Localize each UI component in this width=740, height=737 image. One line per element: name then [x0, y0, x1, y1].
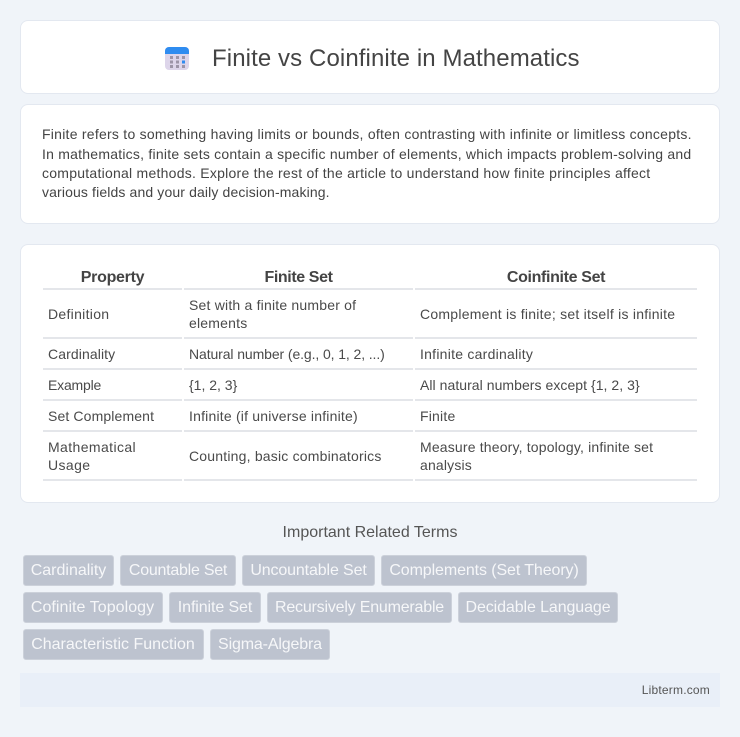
tag: sigma-algebra: Sigma-Algebra [218, 636, 322, 653]
tag: countable set: Countable Set [129, 562, 227, 579]
table header: property: Property [81, 269, 144, 286]
row: mathematical usage: Usage [48, 457, 90, 473]
cardinality: finite: Natural number (e.g., 0, 1, 2, ...) [189, 346, 385, 362]
set complement: coinfinite: Finite [420, 408, 455, 424]
usage: coinfinite: Measure theory, topology, infinite set [420, 439, 653, 455]
definition: finite [189, 297, 356, 331]
usage: coinfinite [420, 439, 653, 473]
tag: recursively enumerable: Recursively Enumerable [275, 599, 444, 616]
table header: coinfinite set: Coinfinite Set [507, 269, 605, 286]
example: coinfinite: All natural numbers except {1, 2, 3} [420, 377, 640, 393]
tag: decidable language: Decidable Language [466, 599, 610, 616]
definition: coinfinite: Complement is finite; set itself is infinite [420, 306, 675, 322]
tag: cofinite topology: Cofinite Topology [31, 599, 154, 616]
tag: complements: Complements (Set Theory) [389, 562, 579, 579]
tag: cofinite topology [23, 592, 163, 623]
tag: uncountable set [242, 555, 375, 586]
tag: complements [381, 555, 587, 586]
intro text: computational methods. Explore the rest of the article to understand how finite principles affect [42, 165, 650, 181]
title: Finite vs Coinfinite in Mathematics [212, 45, 580, 72]
tag: characteristic function: Characteristic Function [31, 636, 195, 653]
tag: infinite set [169, 592, 261, 623]
tag: characteristic function [23, 629, 204, 660]
intro text: various fields and your daily decision-making. [42, 184, 330, 200]
usage: finite: Counting, basic combinatorics [189, 448, 382, 464]
usage: coinfinite: analysis [420, 457, 472, 473]
tag: sigma-algebra [210, 629, 330, 660]
intro text [42, 126, 692, 200]
row: example: Example [48, 377, 101, 393]
tag: infinite set: Infinite Set [178, 599, 252, 616]
tag: uncountable set: Uncountable Set [250, 562, 367, 579]
footer credit: Libterm.com [642, 683, 710, 697]
tag: cardinality [23, 555, 114, 586]
tag: recursively enumerable [267, 592, 452, 623]
panel: introduction [20, 104, 720, 224]
definition: finite: elements [189, 315, 247, 331]
tag: countable set [120, 555, 236, 586]
set complement: finite: Infinite (if universe infinite) [189, 408, 358, 424]
definition: finite: Set with a finite number of [189, 297, 356, 313]
row: set complement: Set Complement [48, 408, 154, 424]
cardinality: coinfinite: Infinite cardinality [420, 346, 533, 362]
tags: related terms [23, 555, 618, 660]
row: mathematical usage [48, 439, 136, 473]
row: cardinality: Cardinality [48, 346, 115, 362]
example: finite: {1, 2, 3} [189, 377, 237, 393]
table header: finite set: Finite Set [264, 269, 332, 286]
row: mathematical usage: Mathematical [48, 439, 136, 455]
intro text: Finite refers to something having limits or bounds, often contrasting with infinite or limitless concepts. [42, 126, 692, 142]
footer bar [20, 673, 720, 707]
related terms heading: Important Related Terms [283, 524, 457, 541]
intro text: In mathematics, finite sets contain a specific number of elements, which impacts problem-solving and [42, 146, 691, 162]
row: definition: Definition [48, 306, 109, 322]
tag: cardinality: Cardinality [31, 562, 106, 579]
tag: decidable language [458, 592, 618, 623]
header panel [20, 20, 720, 94]
icon: calendar [165, 47, 189, 70]
panel: comparison table [20, 244, 720, 503]
